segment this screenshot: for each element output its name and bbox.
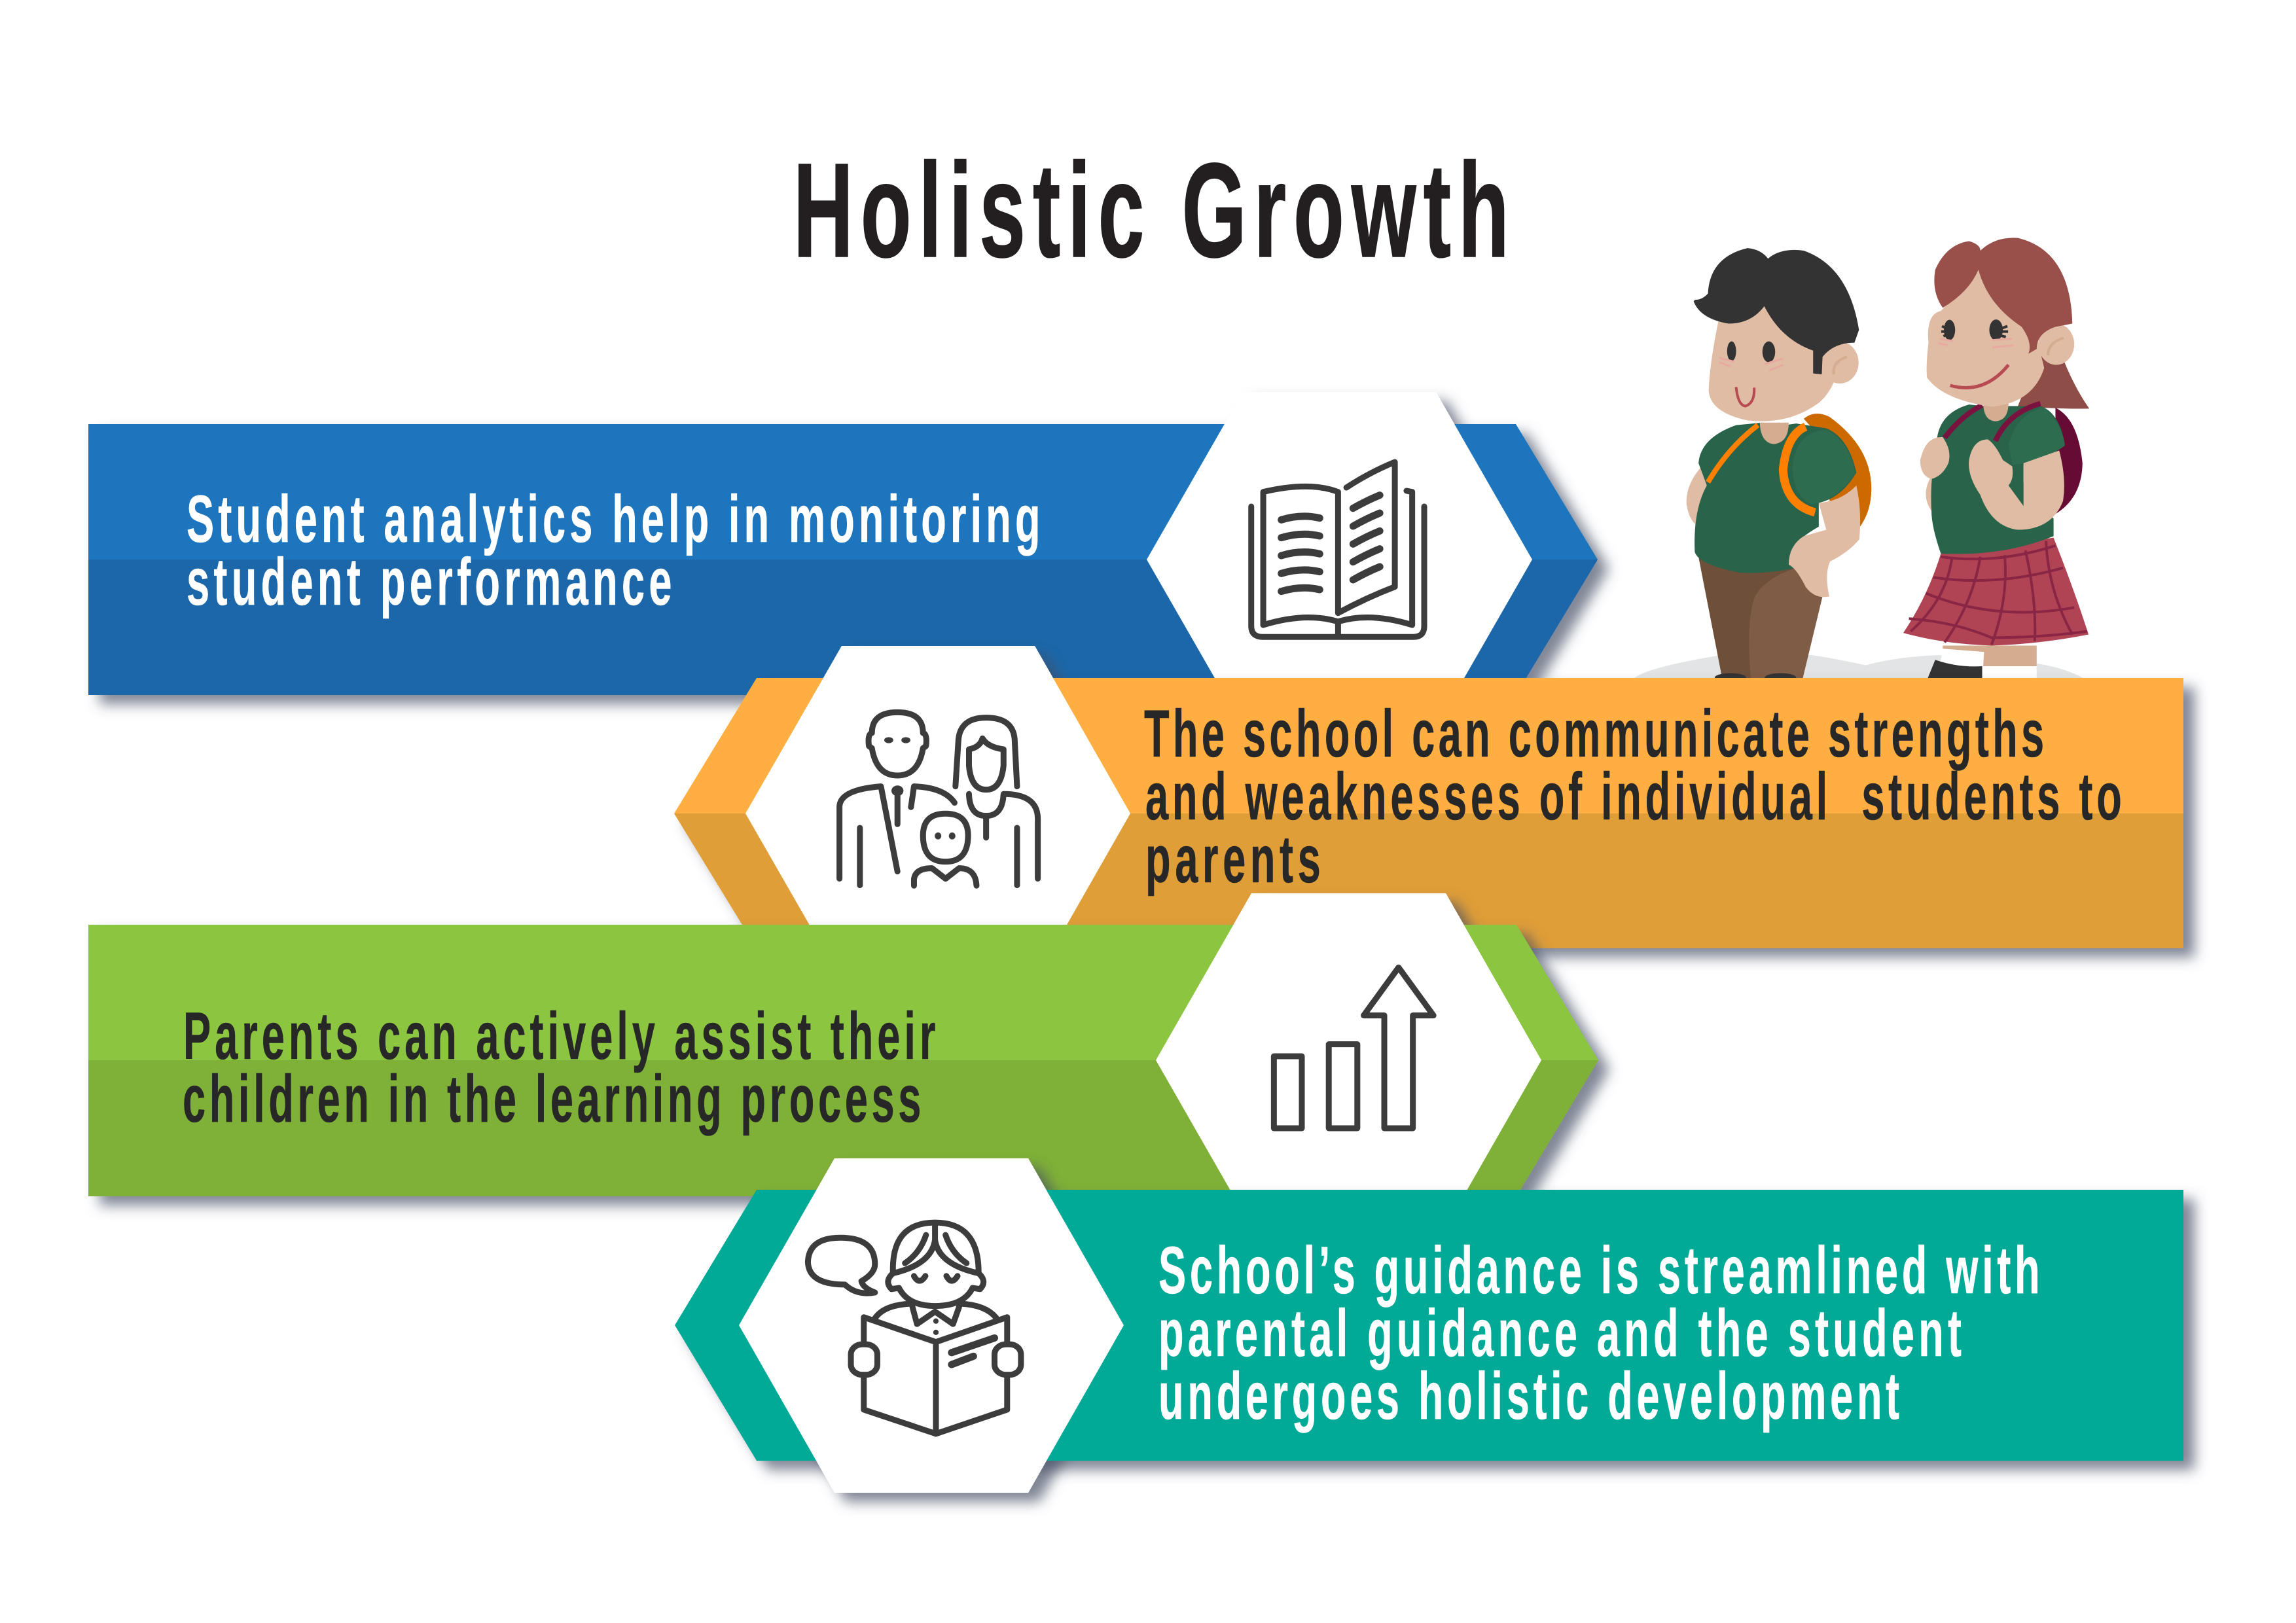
icon: rising bar chart bbox=[1274, 967, 1433, 1128]
illustration: two school children bbox=[1631, 238, 2089, 682]
text: communicate with parents: The school can communicate strengths bbox=[1144, 696, 2044, 771]
text: parents assist: children in the learning process bbox=[183, 1061, 921, 1136]
girl bbox=[1903, 238, 2089, 682]
text: holistic development: undergoes holistic development bbox=[1158, 1358, 1899, 1433]
text: student analytics bbox=[187, 481, 1040, 619]
hexagon: green panel bbox=[1156, 893, 1541, 1227]
text: communicate with parents: parents bbox=[1145, 821, 1321, 897]
panel: communicate with parents (orange) bbox=[674, 646, 2183, 981]
text: holistic development: School’s guidance is streamlined with bbox=[1158, 1232, 2040, 1308]
hexagon: orange panel bbox=[745, 646, 1130, 981]
ground shadow bbox=[1631, 655, 2089, 682]
icon: open book bbox=[1251, 462, 1424, 637]
panel: student analytics (blue) bbox=[88, 392, 1598, 727]
panel: holistic development (teal) bbox=[675, 1158, 2183, 1493]
boy bbox=[1687, 248, 1871, 682]
hexagon: teal panel bbox=[739, 1158, 1124, 1493]
text: communicate with parents: and weaknesses of individual students to bbox=[1145, 758, 2122, 834]
text: student analytics: Student analytics help in monitoring bbox=[187, 481, 1040, 556]
icon: family bbox=[840, 712, 1038, 885]
text: communicate with parents bbox=[1144, 696, 2122, 897]
text: holistic development: parental guidance and the student bbox=[1158, 1295, 1962, 1370]
icon: student reading with speech bubble bbox=[808, 1222, 1021, 1434]
text: parents assist: Parents can actively assist their bbox=[183, 998, 935, 1073]
text: holistic development bbox=[1158, 1232, 2040, 1433]
title: Holistic Growth bbox=[793, 136, 1509, 285]
panel: parents assist (green) bbox=[88, 893, 1598, 1227]
text: parents assist bbox=[183, 998, 935, 1136]
hexagon: blue panel bbox=[1147, 392, 1532, 727]
text: student analytics: student performance bbox=[187, 544, 672, 619]
